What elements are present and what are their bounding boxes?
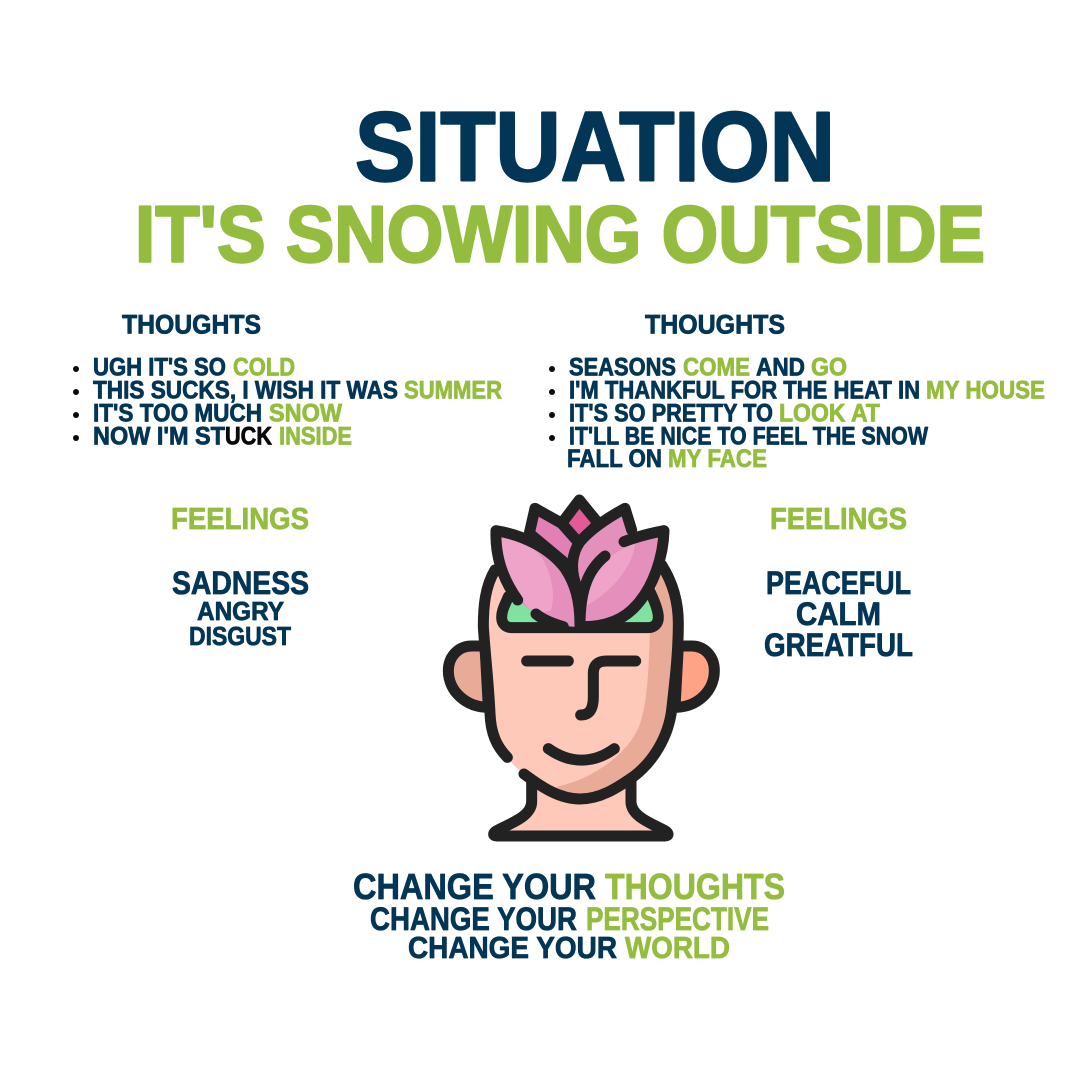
list: left thoughts: COLD bbox=[233, 354, 295, 382]
icon: right petal highlight bbox=[586, 543, 635, 606]
list: left thoughts: INSIDE bbox=[279, 422, 352, 450]
list: left thoughts: UCK bbox=[225, 422, 272, 450]
list: right thoughts: AND bbox=[756, 354, 805, 382]
closing message: PERSPECTIVE bbox=[586, 901, 769, 937]
list: right feelings bbox=[764, 565, 913, 663]
icon: facial features bbox=[527, 661, 636, 760]
list: right feelings: CALM bbox=[796, 596, 881, 632]
icon: center bud bbox=[562, 500, 598, 543]
icon: green opening bbox=[502, 588, 658, 628]
list: right thoughts: FALL ON bbox=[567, 445, 662, 473]
list: right thoughts: GO bbox=[811, 354, 847, 382]
icon: face shadow bbox=[557, 565, 678, 799]
list: right thoughts: MY FACE bbox=[668, 445, 767, 473]
list: left feelings bbox=[172, 565, 309, 651]
list: left thoughts: UGH IT'S SO bbox=[93, 354, 226, 382]
list: right thoughts: IT'LL BE NICE TO FEEL THE SNOW bbox=[569, 422, 928, 450]
list: left thoughts bbox=[73, 354, 502, 450]
icon: ears bbox=[448, 646, 714, 707]
closing message: CHANGE YOUR bbox=[353, 866, 596, 907]
list: right thoughts: MY HOUSE bbox=[926, 376, 1045, 404]
closing message: CHANGE YOUR bbox=[370, 901, 577, 937]
list: left thoughts: SUMMER bbox=[404, 376, 502, 404]
subtitle: IT'S SNOWING OUTSIDE bbox=[135, 190, 985, 278]
list: right thoughts bbox=[549, 354, 1045, 473]
icon: neck bbox=[494, 780, 668, 836]
icon: left back petal bbox=[529, 508, 579, 570]
list: right thoughts: LOOK AT bbox=[779, 400, 880, 428]
heading: right thoughts: THOUGHTS bbox=[645, 310, 785, 340]
list: right thoughts: SEASONS bbox=[569, 354, 676, 382]
icon: head outline bbox=[483, 565, 678, 799]
icon: flower outlines bbox=[496, 508, 664, 627]
closing message bbox=[353, 866, 785, 965]
list: right feelings: GREATFUL bbox=[764, 627, 913, 663]
closing message: THOUGHTS bbox=[605, 866, 785, 907]
heading: right feelings: FEELINGS bbox=[770, 501, 907, 536]
list: left feelings: DISGUST bbox=[189, 621, 291, 651]
list: right thoughts: I'M THANKFUL FOR THE HEAT IN bbox=[569, 376, 920, 404]
heading: left thoughts: THOUGHTS bbox=[122, 310, 261, 340]
icon: right petal fill bbox=[573, 508, 664, 627]
icon: head with lotus flower bbox=[448, 500, 714, 836]
closing message: WORLD bbox=[625, 930, 730, 965]
closing message: CHANGE YOUR bbox=[408, 930, 617, 965]
list: left thoughts: NOW I'M ST bbox=[93, 422, 225, 450]
list: left feelings: ANGRY bbox=[197, 596, 284, 626]
icon: left petal highlight bbox=[501, 536, 553, 612]
list: right thoughts: IT'S SO PRETTY TO bbox=[569, 400, 773, 428]
icon: flower and brain opening bbox=[496, 500, 664, 628]
list: right thoughts: COME bbox=[683, 354, 750, 382]
title: SITUATION bbox=[355, 92, 835, 202]
list: left feelings: SADNESS bbox=[172, 565, 309, 601]
list: left thoughts: IT'S TOO MUCH bbox=[93, 400, 262, 428]
heading: left feelings: FEELINGS bbox=[171, 501, 309, 536]
icon: face bbox=[483, 547, 678, 799]
list: left thoughts: SNOW bbox=[269, 400, 342, 428]
list: right feelings: PEACEFUL bbox=[766, 565, 911, 601]
icon: left petal bbox=[496, 531, 580, 627]
list: left thoughts: THIS SUCKS, I WISH IT WAS bbox=[93, 376, 398, 404]
